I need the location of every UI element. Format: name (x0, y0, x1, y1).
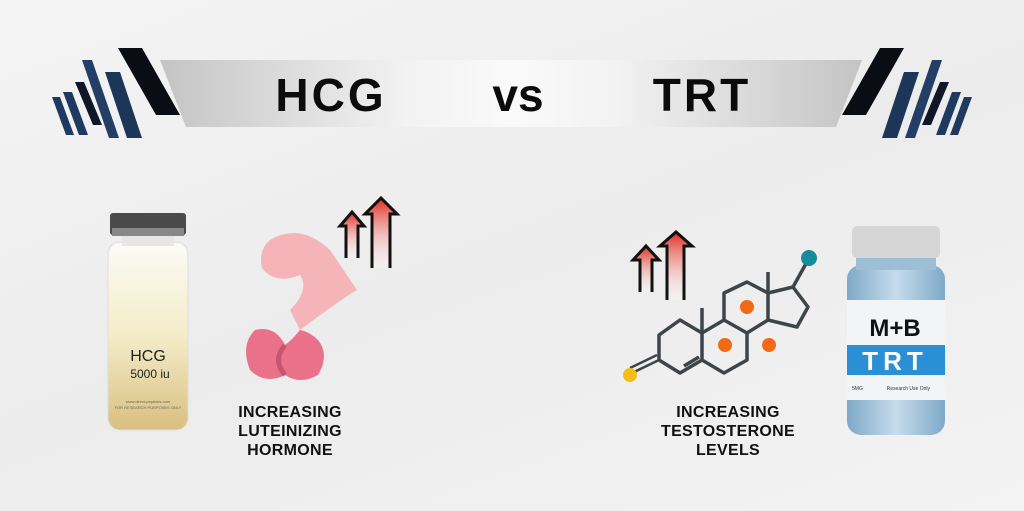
text: increasing luteinizing hormone: INCREASING (238, 404, 342, 421)
text: increasing testosterone levels: TESTOSTERONE (661, 423, 795, 440)
text: increasing luteinizing hormone: HORMONE (247, 442, 333, 459)
banner band (160, 60, 862, 127)
chart: testosterone molecule (623, 250, 817, 382)
heading: TRT: TRT (653, 69, 751, 121)
HCG vial: www.direct-peptides.com (126, 399, 171, 404)
HCG vial: 5000 iu (130, 367, 170, 381)
icon: arrows up (right) (633, 232, 692, 300)
HCG vial: FOR RESEARCH PURPOSES ONLY (115, 405, 182, 410)
text: increasing luteinizing hormone: LUTEINIZING (238, 423, 342, 440)
TRT vial (847, 226, 945, 435)
icon: arrows up (left) (340, 198, 397, 268)
TRT vial: Research Use Only (887, 386, 930, 392)
text: increasing testosterone levels: LEVELS (696, 442, 760, 459)
left bars (52, 48, 180, 138)
text: increasing testosterone levels (661, 404, 795, 459)
HCG vial: HCG (130, 348, 166, 365)
icon: organ (246, 233, 357, 380)
heading: HCG: HCG (275, 69, 387, 121)
text: increasing testosterone levels: INCREASING (676, 404, 780, 421)
heading: vs: vs (492, 69, 544, 121)
right bars (842, 48, 972, 138)
TRT vial: M+B (869, 315, 921, 342)
TRT vial: TRT (862, 346, 928, 376)
text: increasing luteinizing hormone (238, 404, 342, 459)
TRT vial: 5MG (852, 386, 863, 392)
HCG vial (108, 213, 188, 430)
